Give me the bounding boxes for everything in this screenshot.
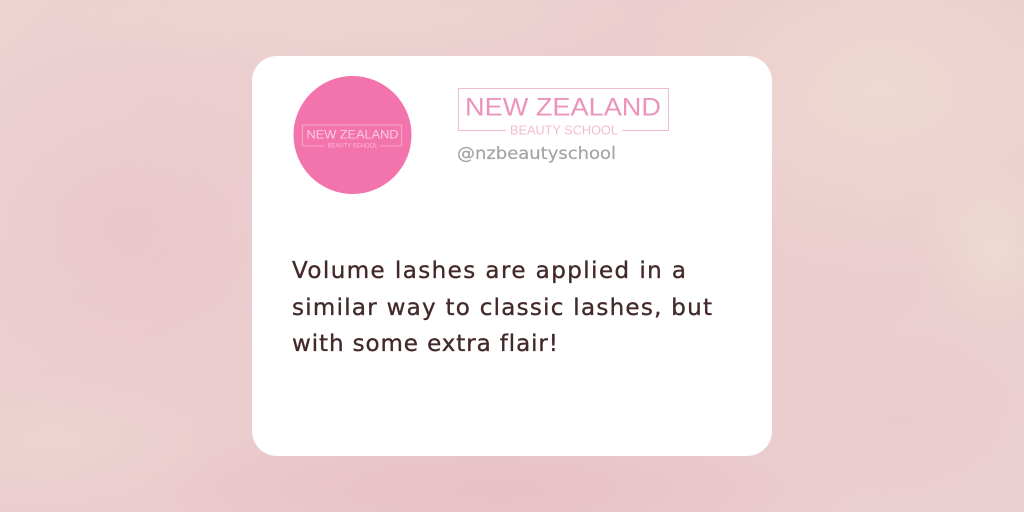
icon: round pink logo [294, 76, 412, 194]
body text: Volume lashes are applied in a [292, 258, 686, 284]
handle: @nzbeautyschool [457, 144, 616, 164]
body text: similar way to classic lashes, but [292, 295, 712, 321]
icon: round pink logo: NEW ZEALAND [306, 128, 399, 142]
logo: New Zealand Beauty School wordmark: NEW ZEALAND [465, 94, 661, 122]
logo: New Zealand Beauty School wordmark [458, 88, 668, 138]
panel: white card [252, 56, 772, 456]
body text: with some extra flair! [292, 331, 558, 357]
logo: New Zealand Beauty School wordmark: BEAUTY SCHOOL [510, 124, 618, 138]
body text [292, 258, 712, 357]
icon: round pink logo: BEAUTY SCHOOL [328, 144, 378, 150]
